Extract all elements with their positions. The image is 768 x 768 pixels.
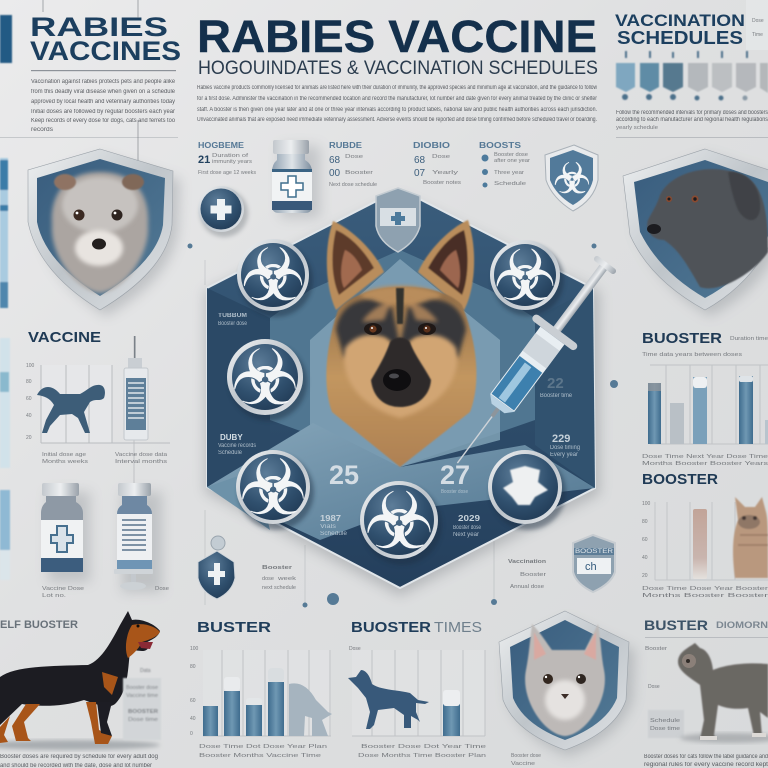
panel: dog info card: Vaccine time <box>126 693 158 699</box>
numbers: 25 and 27: 25 <box>329 460 359 490</box>
text block: rabies vaccines description: Vaccination against rabies protects pets and people alike <box>31 79 176 85</box>
panel: vaccination schedules heading: Dose <box>752 18 764 24</box>
caption: vial labels: Vaccine Dose <box>42 586 84 592</box>
icon: vaccine syringe tube <box>124 336 148 440</box>
panel: buster bar chart <box>190 619 332 759</box>
stats: top row mini labels: DIOBIO <box>413 141 450 150</box>
panel: vaccine chart <box>26 329 170 465</box>
panel: vaccine chart: Interval months <box>115 459 168 465</box>
hexagon small labels: Next year <box>453 532 479 538</box>
hexagon small labels: 2029 <box>458 514 481 523</box>
stats: top row mini labels: 00 <box>329 168 341 179</box>
panel: booster chart with cat: 60 <box>642 537 648 543</box>
icon: bottom left vial <box>41 483 90 582</box>
panel: vaccination schedules heading: Time <box>752 32 763 38</box>
icon: dog silhouette <box>37 385 105 433</box>
panel: booster chart with cat: Dose Time Dose Year Booster <box>642 586 768 592</box>
heading: elf booster: ELF BUOSTER <box>0 619 78 631</box>
icon: sitting tabby cat <box>733 497 768 578</box>
text block: bottom left <box>0 754 158 768</box>
hexagon small labels: Booster dose <box>441 489 468 495</box>
panel: vaccine chart: 80 <box>26 379 32 385</box>
text block: lower center notes: Vaccination <box>508 559 546 565</box>
numbers: 25 and 27: 27 <box>440 460 470 490</box>
stats: top row mini labels: 21 <box>198 154 210 166</box>
numbers: 25 and 27 <box>329 460 470 490</box>
legs <box>0 702 112 744</box>
illustration: black and tan dog <box>0 611 160 750</box>
stats: top row mini labels: Next dose schedule <box>329 182 377 188</box>
panel: booster chart right: Dose Time Next Year Dose Time <box>642 454 768 460</box>
hexagon small labels: DUBY <box>220 433 243 442</box>
icon: kitten face <box>525 624 605 736</box>
icon: small biohazard shield <box>545 145 598 211</box>
illustration: german shepherd <box>326 220 476 467</box>
button: biohazard bottom center: ☣ <box>364 477 434 567</box>
stats: top row mini labels: First dose age 12 weeks <box>198 170 257 176</box>
panel: vaccine chart: 60 <box>26 396 32 402</box>
hexagon small labels: Every year <box>550 452 578 458</box>
panel: vaccine chart: 100 <box>26 363 35 369</box>
stats: top row mini labels: Yearly <box>432 170 459 176</box>
text block: kitten caption <box>511 753 541 767</box>
stats: top row mini labels <box>198 141 530 188</box>
panel: rabies vaccines heading <box>30 12 181 66</box>
panel: buoster times chart <box>348 619 486 759</box>
button: biohazard bottom left: ☣ <box>239 443 307 532</box>
stats: top row mini labels: Booster notes <box>423 180 462 186</box>
icon: booster badge shield: BOOSTER <box>575 549 614 555</box>
panel: booster chart with cat: BOOSTER <box>642 471 718 488</box>
text block: rabies vaccines description: records <box>31 127 53 133</box>
hexagon facets <box>207 250 595 540</box>
hexagon small labels: Booster time <box>540 393 573 399</box>
panel: buster cat card: Dose <box>648 684 660 690</box>
hexagon small labels: Schedule <box>218 450 243 456</box>
panel: buoster times chart: Dose Months Time Booster Plan <box>358 753 486 759</box>
panel: buster cat card: BUSTER <box>644 617 708 633</box>
text block: rabies vaccines description: approved by local health and veterinary authorities today <box>31 99 175 105</box>
eyes <box>364 323 436 335</box>
icon: grey puppy face <box>52 172 148 293</box>
stats: top row mini labels: 07 <box>414 168 426 179</box>
hexagon small labels: Schedule <box>320 531 348 537</box>
stats: top row mini labels: Duration of <box>212 153 249 159</box>
stats: top row mini labels: RUBDE <box>329 141 363 150</box>
panel: booster chart right: Time data years between doses <box>642 352 743 358</box>
text block: lower center notes: week <box>278 576 297 582</box>
panel: buster bar chart: 80 <box>190 664 196 670</box>
stats: top row mini labels: Schedule <box>494 181 526 187</box>
stats: top row mini labels: 68 <box>414 155 426 166</box>
panel: rabies vaccines heading: RABIES <box>30 12 168 42</box>
bars <box>203 668 332 736</box>
stats: top row mini labels: Dose <box>345 154 363 160</box>
muzzle and nose <box>371 338 431 407</box>
chart grid <box>41 365 170 443</box>
text block: lower center notes: Annual dose <box>510 584 544 590</box>
panel: buoster times chart: BUOSTER <box>351 619 431 636</box>
button: biohazard middle left: ☣ <box>231 333 299 422</box>
panel: dog info card: Dose time <box>128 717 158 723</box>
panel: buster cat card <box>644 617 768 768</box>
panel: vaccine chart: Months weeks <box>42 459 89 465</box>
text block: lower center notes: dose <box>262 576 274 582</box>
left edge clipped panels <box>0 15 12 580</box>
stats: top row mini labels: after one year <box>494 158 530 164</box>
icon: plus button <box>198 186 248 237</box>
text block: rabies vaccines description <box>0 70 178 138</box>
text block: rabies vaccines description: Initial doses are followed by regular boosters each year <box>31 109 175 115</box>
button: biohazard top left: ☣ <box>241 233 305 317</box>
button: biohazard top right: ☣ <box>494 235 556 317</box>
panel: vaccine chart: Initial dose age <box>42 452 86 458</box>
connector lines <box>43 0 494 605</box>
hexagon small labels: Vaccine records <box>218 443 256 449</box>
panel: buster cat card: Dose time <box>650 726 680 732</box>
panel: booster chart right <box>642 330 768 467</box>
text block: intro paragraph: Unvaccinated animals that are exposed need immediate veterinary assessment. Adverse events should be reported and dose timing confirmed before scheduled travel or boarding. <box>197 117 597 123</box>
text block: lower center notes: Booster <box>520 572 547 578</box>
panel: buster bar chart: BUSTER <box>197 619 271 636</box>
panel: booster chart with cat: 20 <box>642 573 648 579</box>
panel: booster chart with cat: 40 <box>642 555 648 561</box>
button: white flower bottom right <box>488 450 566 530</box>
panel: central hexagon <box>205 189 600 596</box>
panel: vaccine chart: VACCINE <box>28 329 101 346</box>
shield: grey puppy <box>28 149 180 316</box>
hexagon small labels: Booster dose <box>453 525 482 531</box>
icon: top center mini shield <box>376 188 420 252</box>
panel: buster bar chart: 60 <box>190 698 196 704</box>
panel: vaccine chart: 20 <box>26 435 32 441</box>
stats: top row mini labels: BOOSTS <box>479 141 522 150</box>
panel: booster chart with cat: Months Booster Booster <box>642 593 768 599</box>
connector dots <box>188 244 618 608</box>
icon: dark grey dog head <box>647 169 768 288</box>
chart grid <box>352 650 485 736</box>
icon: small plus shield bottom <box>198 536 235 599</box>
hexagon small labels: Booster dose <box>218 321 248 327</box>
illustration: grey tabby cat <box>678 643 768 743</box>
stats: top row mini labels: Booster dose <box>494 152 528 158</box>
panel: buoster times chart: Dose <box>349 646 361 652</box>
panel: buster bar chart: 40 <box>190 716 196 722</box>
panel: booster chart right: Duration time <box>730 336 768 342</box>
panel: buoster times chart: TIMES <box>434 619 482 636</box>
mane and chest <box>326 287 476 467</box>
panel: dog info card: BOOSTER <box>128 709 158 715</box>
chart grid <box>655 502 768 580</box>
panel: vaccination schedules heading <box>615 0 768 50</box>
text block: intro paragraph: staff. A booster is then given one year later and at one or three year intervals according to product labels, national law and public health authorities across each jurisdiction. <box>197 107 597 113</box>
text block: rabies vaccines description: Keep records of every dose for dogs, cats and ferrets too <box>31 118 176 124</box>
panel: booster chart with cat: 100 <box>642 501 651 507</box>
stats: top row mini labels: 68 <box>329 155 341 166</box>
text block: intro paragraph: Rabies vaccine products commonly licensed for animals are listed here with their duration of immunity, the approved species and minimum age at vaccination, and the guidance to follow <box>197 85 598 91</box>
face cheeks <box>344 335 457 418</box>
subtitle: HOGOUINDATES & VACCINATION SCHEDULES <box>198 58 598 79</box>
hexagon small labels: TUBBUM <box>218 313 247 319</box>
text block: intro paragraph: for a first dose. Administer the vaccination in the recommended location and record the manufacturer, lot number and date given for every animal treated by the clinic or shelter <box>197 96 597 102</box>
panel: buster cat card: regional rules for every vaccine record kept <box>644 762 768 768</box>
icon: booster badge shield <box>573 535 615 592</box>
text block: schedule notes: yearly schedule <box>616 125 658 131</box>
stats: top row mini labels: Booster <box>345 170 374 176</box>
shield: dark grey dog <box>623 149 768 316</box>
panel: rabies vaccines heading: VACCINES <box>30 36 181 66</box>
text block: rabies vaccines description: from this deadly viral disease when given on a schedule <box>31 89 176 95</box>
icon: dog silhouette <box>348 670 429 729</box>
dark head band <box>336 300 466 358</box>
panel: dog info card: Booster dose <box>126 685 158 691</box>
panel: booster chart with cat <box>642 471 768 599</box>
caption: vial labels: Dose <box>155 586 169 592</box>
text block: intro paragraph <box>197 85 598 123</box>
text block: kitten caption: Vaccine <box>511 761 535 767</box>
panel: buster cat card: Booster <box>645 646 667 652</box>
panel: booster chart with cat: 80 <box>642 519 648 525</box>
stats: top row mini labels: Three year <box>494 170 524 176</box>
bars <box>648 376 768 444</box>
text block: bottom left: Booster doses are required by schedule for every adult dog <box>0 754 158 760</box>
icon: small biohazard shield: ☣ <box>553 154 591 203</box>
hexagon small labels: 229 <box>552 433 570 445</box>
panel: dog info card <box>123 668 161 740</box>
chart: vaccination schedule blocks <box>616 51 768 100</box>
text block: kitten caption: Booster dose <box>511 753 541 759</box>
title: RABIES VACCINE <box>197 11 597 62</box>
panel: booster chart right: BUOSTER <box>642 330 722 347</box>
chart grid <box>203 650 331 736</box>
text block: schedule notes <box>616 110 768 138</box>
icon: medicine vial top <box>272 140 320 218</box>
caption: vial labels <box>42 586 169 599</box>
hexagon small labels: 22 <box>547 375 564 392</box>
icon: syringe <box>436 246 628 479</box>
icon: booster badge shield: ch <box>585 561 597 573</box>
panel: buster bar chart: Dose Time Dot Dose Year Plan <box>199 744 327 750</box>
forehead tan <box>360 286 442 305</box>
caption: vial labels: Lot no. <box>42 593 66 599</box>
hexagon small labels: Vials <box>320 524 336 530</box>
panel: booster chart right: Months Booster Booster Years <box>642 461 768 467</box>
panel: vaccination schedules heading: VACCINATION <box>615 11 745 30</box>
panel: dog info card: Data <box>140 668 151 674</box>
panel: buoster times chart: Booster Dose Dot Year Time <box>361 744 486 750</box>
panel: buster cat card: DIOMORN <box>716 620 768 630</box>
bar <box>443 690 460 736</box>
panel: buster bar chart: 0 <box>190 731 193 737</box>
hexagon small labels: Dose timing <box>550 445 580 451</box>
chart grid <box>650 365 768 444</box>
hexagon small labels <box>218 313 580 538</box>
panel: vaccine chart: Vaccine dose data <box>115 452 167 458</box>
text block: lower center notes: next schedule <box>262 585 296 591</box>
shield: grey kitten <box>499 611 635 756</box>
hexagon small labels: 1987 <box>320 514 342 523</box>
panel: buster cat card: Schedule <box>650 718 680 724</box>
panel: vaccination schedules heading: SCHEDULES <box>617 28 743 48</box>
stats: top row mini labels: HOGBEME <box>198 141 245 150</box>
ears <box>327 220 474 310</box>
stats: top row mini labels: immunity years <box>212 159 253 165</box>
text block: lower center notes: Booster <box>262 565 292 571</box>
panel: vaccine chart: 40 <box>26 413 32 419</box>
stats: top row mini labels: Dose <box>432 154 450 160</box>
panel: buster bar chart: Booster Months Vaccine Time <box>199 753 321 759</box>
icon: bottom right vial syringe <box>114 483 162 592</box>
text block: lower center notes <box>262 559 547 591</box>
panel: buster bar chart: 100 <box>190 646 199 652</box>
